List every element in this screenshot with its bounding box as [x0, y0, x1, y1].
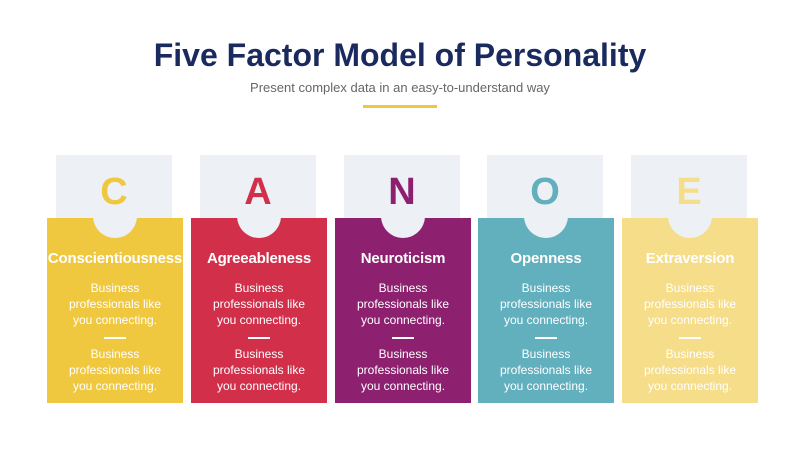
panel: O: you connecting.	[504, 379, 588, 393]
panel: A: you connecting.	[217, 313, 301, 327]
accent line	[363, 105, 437, 108]
panel: A: you connecting.	[217, 379, 301, 393]
panel: C: Conscientiousness	[48, 250, 182, 267]
panel: E: you connecting.	[648, 379, 732, 393]
panel: N: professionals like	[357, 297, 449, 311]
subtitle: Present complex data in an easy-to-understand way	[250, 80, 550, 95]
panel: O: professionals like	[500, 363, 592, 377]
panel: A: professionals like	[213, 363, 305, 377]
panel: C: Business	[91, 281, 139, 295]
panel: E: Business	[666, 281, 714, 295]
panel: O: O	[530, 171, 560, 213]
panel: N: Neuroticism	[361, 250, 445, 267]
panel: C: professionals like	[69, 363, 161, 377]
panel: E: Extraversion	[646, 250, 734, 267]
panel: E: professionals like	[644, 297, 736, 311]
panel: N: professionals like	[357, 363, 449, 377]
panel: E: professionals like	[644, 363, 736, 377]
panel: O: Openness	[511, 250, 581, 267]
panel: O: Business	[522, 347, 570, 361]
panel: A: Agreeableness	[207, 250, 311, 267]
panel: N: you connecting.	[361, 313, 445, 327]
panel: A: professionals like	[213, 297, 305, 311]
panel: O: professionals like	[500, 297, 592, 311]
panel: E: you connecting.	[648, 313, 732, 327]
panel: O: you connecting.	[504, 313, 588, 327]
panel: E: E	[676, 171, 702, 213]
panel: C: professionals like	[69, 297, 161, 311]
panel: N: N	[388, 171, 416, 213]
panel: C: you connecting.	[73, 313, 157, 327]
panel: A	[191, 155, 327, 403]
title: Five Factor Model of Personality	[154, 37, 646, 73]
panel: N: Business	[379, 281, 427, 295]
panel: N: Business	[379, 347, 427, 361]
panel: E: Business	[666, 347, 714, 361]
panel: C: Business	[91, 347, 139, 361]
panel: N	[335, 155, 471, 403]
panel: C: you connecting.	[73, 379, 157, 393]
panel: N: you connecting.	[361, 379, 445, 393]
panel: C: C	[100, 171, 128, 213]
panel: E	[622, 155, 758, 403]
panel: A: A	[244, 171, 272, 213]
panel: O	[478, 155, 614, 403]
panel: C	[47, 155, 183, 403]
panel: A: Business	[235, 347, 283, 361]
panel: O: Business	[522, 281, 570, 295]
panel: A: Business	[235, 281, 283, 295]
